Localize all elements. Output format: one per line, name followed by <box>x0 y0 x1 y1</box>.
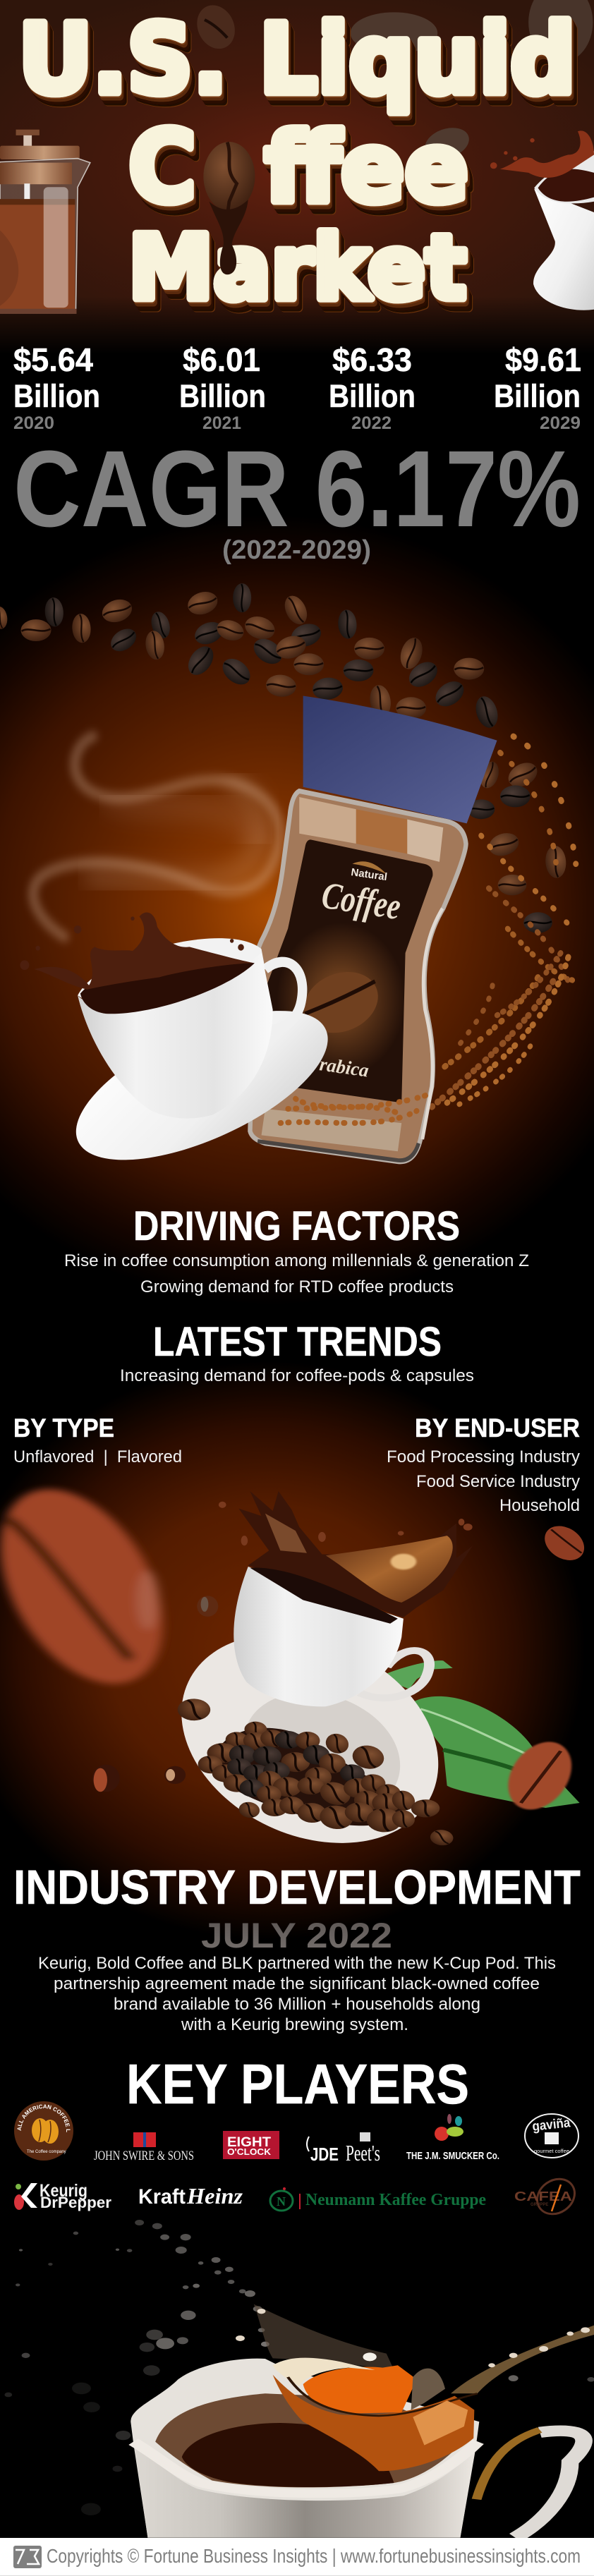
2020 value: 2020 <box>13 413 54 433</box>
2029 value: 2029 <box>540 413 581 433</box>
logo: John Swire and Sons <box>94 2132 194 2163</box>
by end-user segment: Food Service Industry <box>416 1472 580 1491</box>
logo: Neumann Kaffee Gruppe: N <box>277 2194 286 2209</box>
jar <box>250 791 466 1162</box>
title: U.S. Liquid Coffee Market: U.S. Liquid <box>18 4 576 116</box>
coffee grain swirl <box>432 736 576 1107</box>
2022 value <box>329 341 416 433</box>
cup body <box>78 953 273 1119</box>
handle <box>360 1651 429 1698</box>
jar label: Natural: Natural <box>350 866 388 883</box>
2022 value: $6.33 <box>332 341 412 378</box>
logo: Gavina: gourmet coffee <box>534 2149 569 2154</box>
steam <box>33 736 280 937</box>
market values by year <box>13 341 581 433</box>
logo: JDE Peet's <box>307 2132 380 2165</box>
cup body <box>131 2359 479 2538</box>
by type segment <box>13 1414 182 1466</box>
loose blurred beans <box>92 1522 592 1814</box>
second illustration: tilted cup on saucer <box>0 1477 592 1870</box>
saucer well <box>215 1676 429 1830</box>
footer bar <box>0 2538 594 2576</box>
saucer <box>133 1608 487 1870</box>
2020 value: $5.64 <box>13 341 93 378</box>
2022 value: Billion <box>329 378 416 414</box>
flying coffee beans <box>0 583 567 933</box>
logo: JDE Peet's: Peet's <box>346 2140 380 2165</box>
date: JULY 2022 <box>201 1916 392 1955</box>
logo: The J.M. Smucker Co.: THE J.M. SMUCKER Co. <box>406 2150 499 2162</box>
industry development text: Keurig, Bold Coffee and BLK partnered with the new K-Cup Pod. This <box>38 1954 556 1973</box>
CAGR period: (2022-2029) <box>222 535 371 565</box>
icon: coffee bean with drip as the letter o <box>203 142 255 274</box>
by end-user segment: Household <box>499 1496 580 1515</box>
logo: The J.M. Smucker Co. <box>406 2114 499 2162</box>
2029 value: $9.61 <box>505 341 581 378</box>
logo: Neumann Kaffee Gruppe <box>270 2187 486 2211</box>
logo: Gavina <box>525 2114 578 2158</box>
footer logo <box>13 2546 42 2568</box>
logo: JDE Peet's: JDE <box>310 2144 339 2165</box>
logo: Cafea Gruppe: CAFEA <box>514 2189 572 2204</box>
driving factors list: Rise in coffee consumption among millennials & generation Z <box>64 1251 529 1270</box>
by type segment: Unflavored | Flavored <box>13 1447 182 1466</box>
logo: Keurig Dr Pepper: Keurig <box>40 2181 87 2201</box>
2022 value: 2022 <box>351 413 392 433</box>
driving factors list <box>64 1251 529 1296</box>
coffee leaves <box>379 1660 580 1808</box>
orange splash crown <box>273 2358 478 2471</box>
latest trends text: Increasing demand for coffee-pods & capsules <box>120 1366 474 1385</box>
2020 value: Billion <box>13 378 100 414</box>
icon: coffee cup with splash, top right <box>490 130 594 310</box>
2029 value: Billion <box>494 378 581 414</box>
cup inner wall <box>155 2393 466 2487</box>
hero illustration: jar, cup and beans <box>0 583 576 1191</box>
logo: Keurig Dr Pepper: DrPepper <box>40 2194 111 2211</box>
by end-user segment <box>387 1414 580 1515</box>
industry development text: partnership agreement made the significant black-owned coffee <box>54 1974 540 1993</box>
logo: John Swire and Sons: JOHN SWIRE & SONS <box>94 2149 194 2163</box>
title: U.S. Liquid Coffee Market: Market <box>128 216 466 320</box>
cup front body <box>135 2446 475 2538</box>
by end-user segment: BY END-USER <box>415 1414 580 1442</box>
coffee pool <box>182 2423 394 2487</box>
logo: Cafea Gruppe: GRUPPE <box>531 2203 548 2207</box>
jar cap <box>303 696 497 823</box>
2029 value <box>494 341 581 433</box>
title: U.S. Liquid Coffee Market <box>18 4 576 320</box>
saucer <box>58 980 346 1191</box>
by type segment: BY TYPE <box>13 1414 114 1442</box>
cup handle <box>265 962 303 1030</box>
logo: Cafea Gruppe <box>514 2172 581 2221</box>
driving factors heading: DRIVING FACTORS <box>133 1203 460 1249</box>
coffee splash crown <box>219 1491 473 1624</box>
logo: All American Coffee: The Coffee company <box>27 2150 66 2154</box>
logo: Eight O'Clock Coffee: EIGHT <box>227 2135 271 2150</box>
coffee in cup <box>80 956 255 1014</box>
title: U.S. Liquid Coffee Market: C <box>128 110 196 225</box>
logo: Neumann Kaffee Gruppe: Neumann Kaffee Gruppe <box>305 2191 486 2209</box>
logo: Eight O'Clock Coffee: O'CLOCK <box>227 2146 272 2157</box>
coffee splash <box>20 913 254 990</box>
cup front rim <box>133 2442 478 2493</box>
2021 value: 2021 <box>202 413 241 433</box>
industry development text: with a Keurig brewing system. <box>181 2015 408 2034</box>
by end-user segment: Food Processing Industry <box>387 1447 580 1466</box>
photo: coffee splashing from white cup <box>4 2220 594 2538</box>
beans on saucer <box>173 1696 458 1848</box>
key players heading: KEY PLAYERS <box>126 2053 469 2115</box>
logo: Kraft Heinz: Kraft <box>138 2185 186 2209</box>
jar label: Arabica: rabica <box>318 1053 370 1081</box>
logo: Gavina: gaviña <box>531 2115 571 2134</box>
2021 value: $6.01 <box>183 341 260 378</box>
logo: All American Coffee <box>14 2101 73 2161</box>
logo: Kraft Heinz: Heinz <box>186 2183 243 2209</box>
driving factors list: Growing demand for RTD coffee products <box>140 1277 454 1296</box>
blurred foreground bean <box>0 1477 193 1696</box>
title: U.S. Liquid Coffee Market: ffee <box>265 113 468 224</box>
spray droplets <box>4 2220 594 2515</box>
logo: Eight O'Clock Coffee <box>223 2131 279 2159</box>
industry development text <box>38 1954 556 2034</box>
cup body <box>234 1567 404 1706</box>
icon: french press <box>0 130 90 314</box>
jar label: Coffee: Coffee <box>319 874 404 928</box>
splash stream <box>254 2304 394 2370</box>
latest trends heading: LATEST TRENDS <box>153 1319 442 1365</box>
logo: Kraft Heinz <box>138 2183 243 2209</box>
logo: Keurig Dr Pepper <box>14 2181 111 2211</box>
cup back rim <box>78 938 265 1018</box>
2021 value <box>179 341 266 433</box>
2020 value <box>13 341 100 433</box>
cup handle <box>477 2430 584 2538</box>
faint background beans <box>190 0 593 164</box>
2021 value: Billion <box>179 378 266 414</box>
industry development text: brand available to 36 Million + households along <box>114 1995 480 2014</box>
